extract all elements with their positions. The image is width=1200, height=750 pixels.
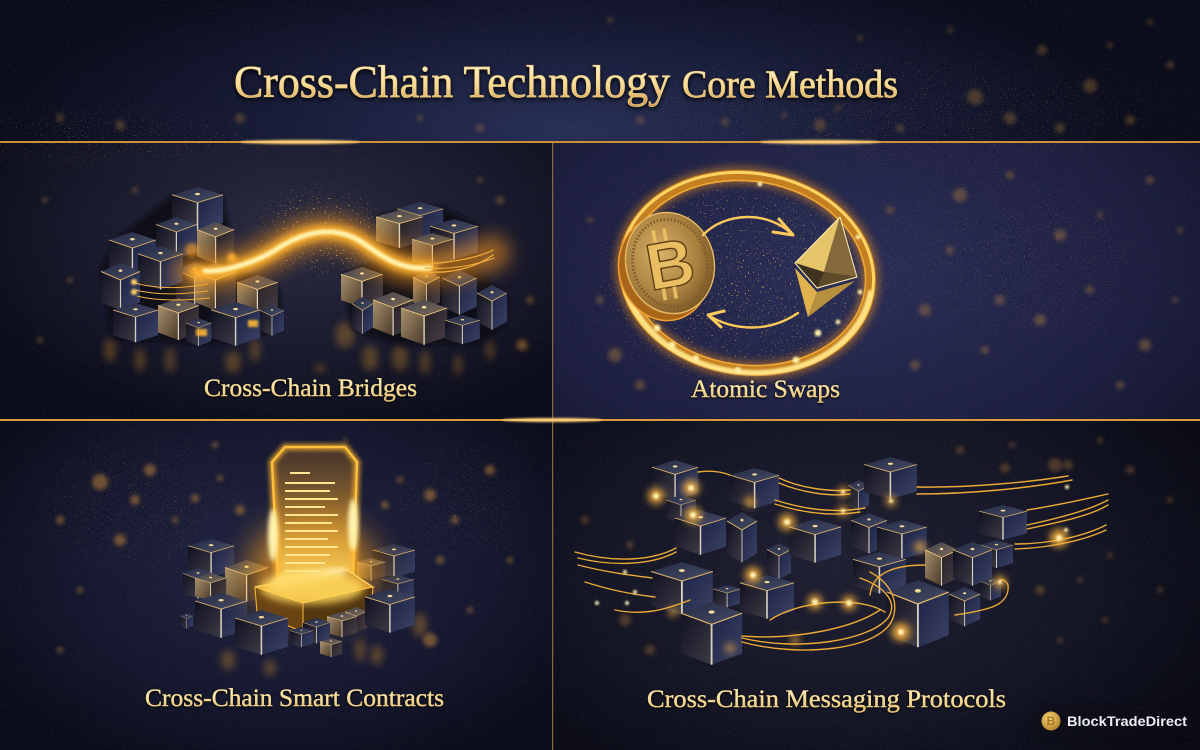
front cubes	[180, 589, 415, 657]
sparkle dome	[245, 180, 398, 284]
ring	[607, 156, 887, 390]
panel: cross-chain bridges	[100, 165, 527, 402]
watermark logo: B	[1047, 714, 1056, 728]
message streams	[575, 471, 1108, 650]
chain cluster right	[341, 202, 507, 345]
floor reflections	[221, 613, 427, 676]
glowing nodes	[648, 480, 1068, 652]
chain cluster left	[100, 187, 284, 346]
glowing base platform	[255, 570, 373, 632]
floor reflections	[104, 322, 527, 376]
bitcoin coin	[607, 202, 726, 331]
glow behind contract	[248, 520, 378, 620]
node cubes	[651, 457, 1027, 665]
panel: smart contracts	[145, 447, 444, 712]
title: Cross-Chain Technology	[234, 56, 670, 107]
panel: messaging protocols	[575, 457, 1108, 713]
swap arrows	[703, 217, 798, 328]
watermark logo: BlockTradeDirect	[1067, 713, 1187, 729]
back cubes	[183, 539, 415, 638]
ring highlights	[638, 182, 862, 373]
label: Atomic Swaps	[691, 376, 840, 403]
label: Cross-Chain Bridges	[204, 375, 417, 402]
glowing bridge stream	[190, 232, 494, 272]
ethereum diamond	[795, 217, 857, 317]
title	[234, 56, 898, 107]
title: Core Methods	[682, 63, 898, 106]
label: Cross-Chain Smart Contracts	[145, 685, 444, 712]
bitcoin coin: B	[640, 223, 700, 305]
watermark logo	[1030, 706, 1200, 738]
label: Cross-Chain Messaging Protocols	[647, 686, 1006, 713]
panel: atomic swaps	[576, 154, 902, 405]
contract document	[268, 447, 358, 585]
